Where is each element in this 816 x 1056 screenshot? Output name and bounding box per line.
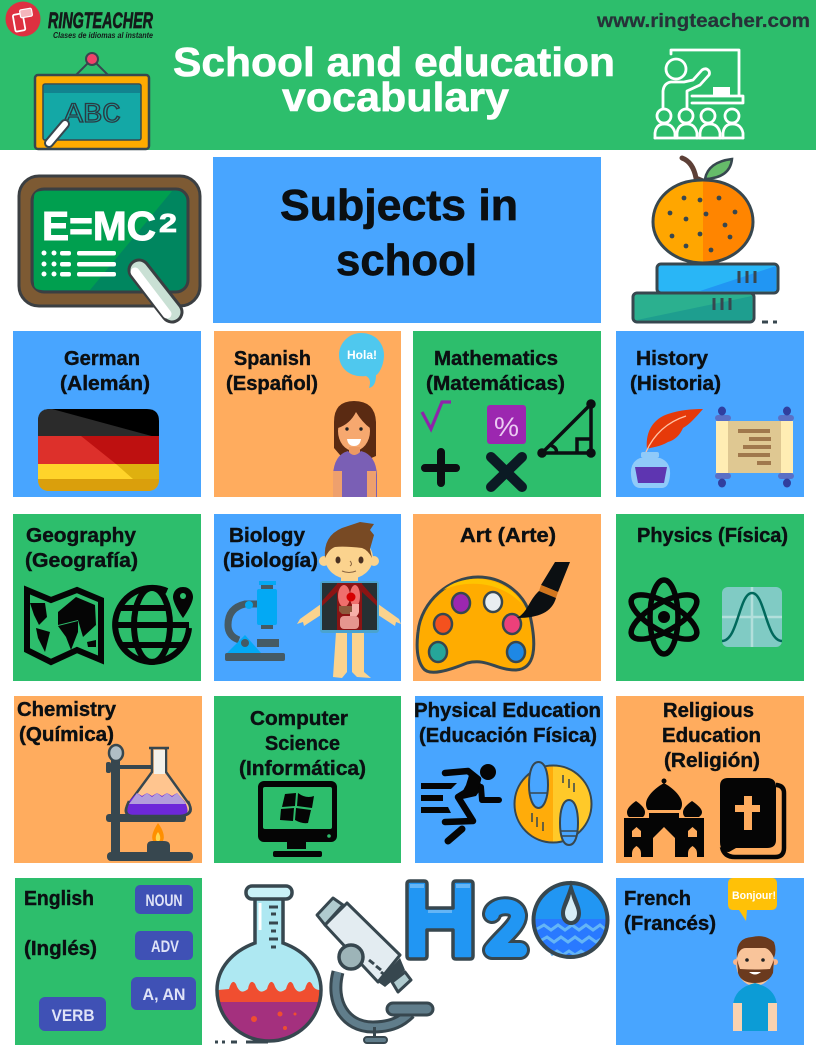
heading: Computer bbox=[250, 708, 348, 730]
panel: Physical Education bbox=[414, 696, 603, 863]
heading bbox=[239, 708, 366, 780]
heading bbox=[426, 348, 565, 395]
icon: E=MC2 chalkboard: E=MC bbox=[42, 203, 156, 249]
heading: (Informática) bbox=[239, 758, 366, 780]
title bbox=[173, 39, 615, 120]
icon: bell curve chart bbox=[722, 587, 782, 647]
icon: paint palette bbox=[417, 577, 534, 672]
panel: French bbox=[616, 878, 804, 1045]
icon: E=MC2 chalkboard bbox=[19, 176, 200, 314]
panel: German bbox=[13, 331, 201, 497]
icon: multiply bbox=[491, 457, 522, 487]
title: vocabulary bbox=[282, 74, 509, 120]
tag: NOUN bbox=[135, 885, 193, 914]
icon: ABC board: ABC bbox=[64, 100, 121, 131]
heading bbox=[60, 348, 150, 395]
heading: (Geografía) bbox=[25, 550, 138, 572]
panel: English bbox=[15, 878, 202, 1045]
logo: RINGTEACHER bbox=[48, 8, 153, 33]
panel: Biology bbox=[214, 514, 401, 681]
heading: Mathematics bbox=[434, 348, 558, 370]
panel: History bbox=[616, 331, 804, 497]
heading: (Alemán) bbox=[60, 373, 150, 395]
icon: percent bbox=[487, 405, 526, 444]
heading: (Matemáticas) bbox=[426, 373, 565, 395]
icon: microscope bbox=[225, 581, 285, 661]
panel: Geography bbox=[13, 514, 201, 681]
heading: English bbox=[24, 888, 94, 910]
icon: map bbox=[27, 590, 101, 662]
heading: Science bbox=[265, 733, 340, 755]
icon: E=MC2 chalkboard: 2 bbox=[159, 208, 177, 238]
heading bbox=[24, 888, 97, 960]
heading: French bbox=[624, 888, 691, 910]
icon: paintbrush bbox=[517, 562, 570, 618]
heading: (Francés) bbox=[624, 913, 716, 935]
website url: www.ringteacher.com bbox=[596, 11, 810, 32]
heading: (Inglés) bbox=[24, 938, 97, 960]
heading: (Español) bbox=[226, 373, 318, 395]
title: School and education bbox=[173, 39, 615, 85]
heading: Physical Education bbox=[414, 700, 601, 722]
heading bbox=[226, 348, 318, 395]
heading bbox=[662, 700, 761, 772]
speech bubble: Hola!: Hola! bbox=[347, 348, 377, 362]
tag: VERB: VERB bbox=[52, 1006, 94, 1025]
icon: German flag bbox=[38, 409, 159, 491]
icon: mosque bbox=[624, 778, 704, 857]
panel: Art bbox=[413, 514, 601, 681]
logo: Clases de idiomas al instante bbox=[53, 31, 153, 40]
icon: bearded man bbox=[733, 936, 778, 1031]
panel: Physics bbox=[616, 514, 804, 681]
icon: runner bbox=[421, 764, 499, 841]
panel: Subjects in school heading: Subjects in bbox=[280, 181, 518, 230]
heading bbox=[624, 888, 716, 935]
panel: Mathematics bbox=[413, 331, 601, 497]
icon: bible bbox=[720, 778, 784, 857]
heading: Spanish bbox=[234, 348, 311, 370]
icon: square root bbox=[422, 402, 451, 429]
icon: quill and ink bbox=[631, 409, 703, 488]
heading: Chemistry bbox=[17, 699, 117, 721]
panel: Subjects in school heading: school bbox=[336, 236, 477, 285]
heading bbox=[414, 700, 601, 747]
panel: Subjects in school heading bbox=[213, 157, 601, 323]
panel: Religious Education bbox=[616, 696, 804, 863]
icon: round flask bbox=[215, 886, 321, 1042]
heading: Biology bbox=[229, 525, 306, 547]
tag: VERB bbox=[39, 997, 106, 1031]
heading: (Historia) bbox=[630, 373, 721, 395]
heading: (Religión) bbox=[664, 750, 760, 772]
icon: lab stand with flask and burner bbox=[106, 745, 193, 861]
heading: (Biología) bbox=[223, 550, 318, 572]
heading: Physics (Física) bbox=[637, 525, 788, 547]
heading bbox=[17, 699, 117, 746]
heading: History bbox=[636, 348, 709, 370]
icon: microscope large bbox=[317, 898, 433, 1043]
icon: computer monitor bbox=[258, 781, 337, 857]
icon: globe with pin bbox=[115, 587, 193, 662]
tag: ADV bbox=[135, 931, 193, 960]
heading: (Química) bbox=[19, 724, 114, 746]
icon: boy with anatomy bbox=[297, 522, 401, 678]
icon: footprints in circle bbox=[514, 762, 592, 845]
icon: teacher at blackboard bbox=[655, 50, 743, 138]
heading bbox=[630, 348, 721, 395]
panel: Computer Science bbox=[214, 696, 401, 863]
icon: scroll bbox=[715, 406, 794, 488]
icon: H2O bbox=[407, 880, 608, 959]
heading: Religious bbox=[663, 700, 754, 722]
heading: (Educación Física) bbox=[419, 725, 597, 747]
icon: ABC board bbox=[35, 53, 149, 149]
speech bubble: Hola! bbox=[339, 333, 384, 388]
tag: ADV: ADV bbox=[151, 937, 180, 956]
header band bbox=[0, 0, 816, 150]
speech bubble: Bonjour! bbox=[728, 878, 777, 921]
speech bubble: Bonjour!: Bonjour! bbox=[732, 890, 776, 902]
tag: A, AN bbox=[131, 977, 196, 1010]
heading: Art (Arte) bbox=[460, 525, 556, 547]
icon: girl bbox=[333, 401, 377, 497]
icon: plus bbox=[425, 452, 456, 483]
heading: German bbox=[64, 348, 140, 370]
icon: orange on books bbox=[633, 158, 778, 322]
icon: set square bbox=[539, 401, 594, 456]
icon: atom bbox=[625, 580, 703, 654]
tag: NOUN: NOUN bbox=[146, 891, 182, 910]
heading: Geography bbox=[26, 525, 137, 547]
tag: A, AN: A, AN bbox=[142, 985, 186, 1004]
panel: Chemistry bbox=[14, 696, 202, 863]
heading: Education bbox=[662, 725, 761, 747]
panel: Spanish bbox=[214, 331, 401, 497]
heading bbox=[223, 525, 318, 572]
icon: percent: % bbox=[494, 412, 519, 442]
heading bbox=[25, 525, 138, 572]
logo bbox=[6, 2, 153, 40]
